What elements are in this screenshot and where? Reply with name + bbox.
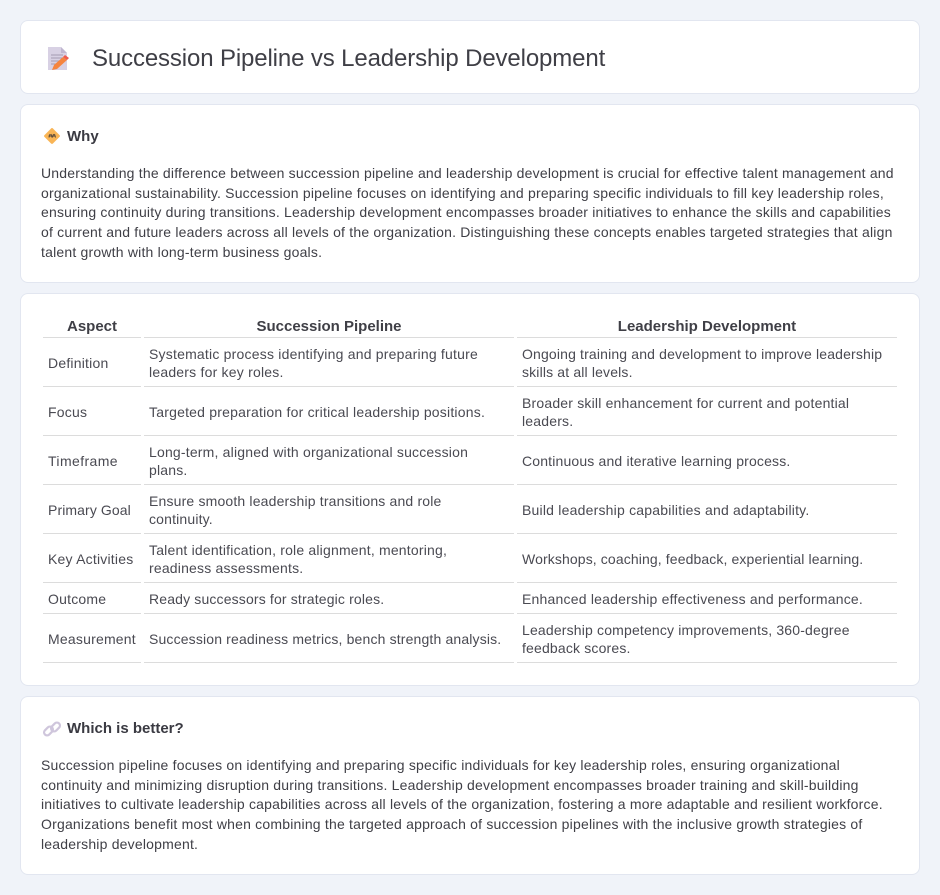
row: definition: Definition	[48, 355, 108, 371]
row: primary goal: Ensure smooth leadership transitions and role	[149, 493, 441, 509]
row: outcome	[43, 591, 897, 614]
why text block: organizational sustainability. Succession pipeline focuses on identifying and preparing specific individuals to fill key leadership roles,	[41, 185, 884, 201]
row: key activities: readiness assessments.	[149, 560, 303, 576]
row: primary goal: Primary Goal	[48, 502, 131, 518]
row: focus: leaders.	[522, 413, 573, 429]
header panel	[20, 20, 920, 94]
row: measurement: Leadership competency improvements, 360-degree	[522, 622, 850, 638]
which is better text block: leadership development.	[41, 836, 198, 852]
row: outcome: Outcome	[48, 591, 106, 607]
row: timeframe: Long-term, aligned with organizational succession	[149, 444, 468, 460]
icon: warning diamond	[44, 128, 60, 144]
row: primary goal: Build leadership capabilities and adaptability.	[522, 502, 809, 518]
which is better text block: continuity and minimizing disruption during transitions. Leadership development encompasses broader training and skill-building	[41, 777, 859, 793]
table header row	[43, 318, 897, 338]
panel: why	[20, 104, 920, 283]
why text block: Understanding the difference between succession pipeline and leadership development is crucial for effective talent management and	[41, 165, 894, 181]
row: focus: Broader skill enhancement for current and potential	[522, 395, 849, 411]
row: focus	[43, 395, 897, 436]
row: definition: Ongoing training and development to improve leadership	[522, 346, 882, 362]
why text block: ensuring continuity during transitions. Leadership development encompasses broader initiatives to enhance the skills and capabilities	[41, 204, 891, 220]
heading: why: Why	[67, 128, 99, 145]
row: key activities	[43, 542, 897, 583]
heading: which is better: Which is better?	[67, 720, 184, 737]
row: focus: Focus	[48, 404, 87, 420]
row: measurement: feedback scores.	[522, 640, 631, 656]
title: Succession Pipeline vs Leadership Development	[92, 45, 605, 72]
row: measurement: Succession readiness metrics, bench strength analysis.	[149, 631, 501, 647]
row: key activities: Workshops, coaching, feedback, experiential learning.	[522, 551, 863, 567]
panel: comparison table	[20, 293, 920, 686]
which is better text block: Organizations benefit most when combining the targeted approach of succession pipelines with the inclusive growth strategies of	[41, 816, 863, 832]
row: definition: Systematic process identifying and preparing future	[149, 346, 478, 362]
row: definition: leaders for key roles.	[149, 364, 284, 380]
why text block: of current and future leaders across all levels of the organization. Distinguishing these concepts enables targeted strategies that align	[41, 224, 893, 240]
row: outcome: Enhanced leadership effectiveness and performance.	[522, 591, 863, 607]
row: measurement: Measurement	[48, 631, 136, 647]
table header row: Aspect	[67, 318, 117, 335]
row: primary goal: continuity.	[149, 511, 213, 527]
row: timeframe: plans.	[149, 462, 188, 478]
row: timeframe	[43, 444, 897, 485]
row: outcome: Ready successors for strategic roles.	[149, 591, 384, 607]
icon: document with pencil	[48, 47, 69, 70]
why text block	[41, 165, 894, 260]
row: primary goal	[43, 493, 897, 534]
panel: which is better	[20, 696, 920, 875]
row: definition	[43, 346, 897, 387]
which is better text block: initiatives to cultivate leadership capabilities across all levels of the organization, fostering a more adaptable and resilient workforce.	[41, 796, 883, 812]
row: timeframe: Continuous and iterative learning process.	[522, 453, 790, 469]
table header row: Succession Pipeline	[256, 318, 402, 335]
row: measurement	[43, 622, 897, 663]
row: key activities: Talent identification, role alignment, mentoring,	[149, 542, 447, 558]
row: timeframe: Timeframe	[48, 453, 118, 469]
row: focus: Targeted preparation for critical leadership positions.	[149, 404, 485, 420]
which is better text block	[41, 757, 883, 852]
row: key activities: Key Activities	[48, 551, 133, 567]
which is better text block: Succession pipeline focuses on identifying and preparing specific individuals for key leadership roles, ensuring organizational	[41, 757, 840, 773]
table header row: Leadership Development	[618, 318, 796, 335]
why text block: talent growth with long-term business goals.	[41, 244, 322, 260]
icon: chain link	[43, 722, 61, 736]
row: definition: skills at all levels.	[522, 364, 633, 380]
